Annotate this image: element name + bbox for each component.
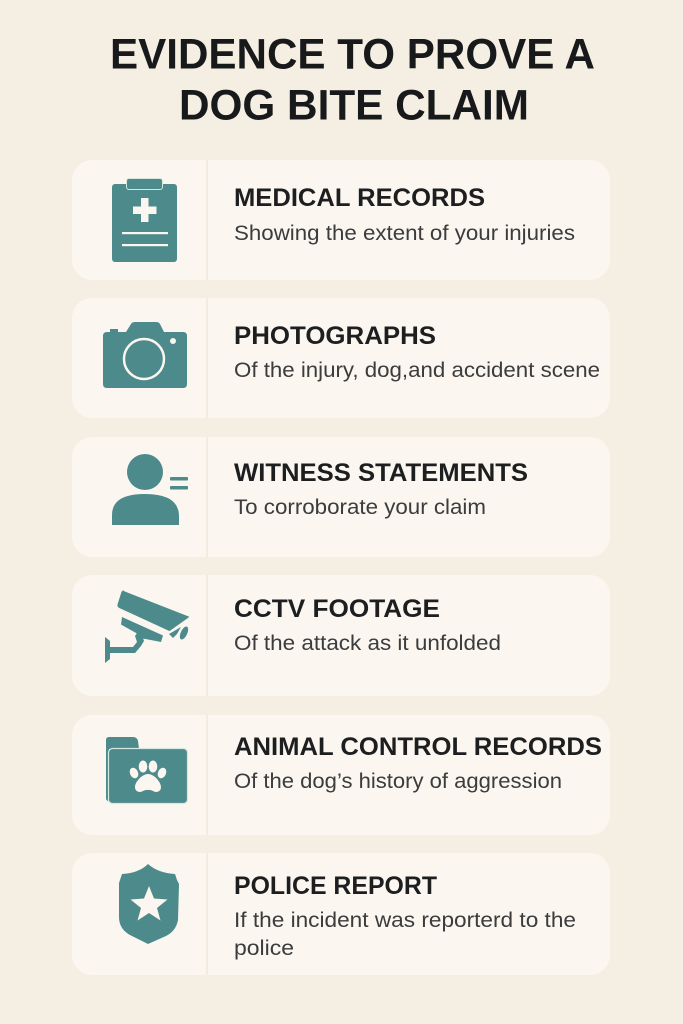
description: Of the injury, dog,and accident scene bbox=[234, 359, 600, 382]
heading: PHOTOGRAPHS bbox=[234, 322, 436, 350]
icon: folder with paw bbox=[106, 737, 188, 804]
description: Of the dog’s history of aggression bbox=[234, 770, 562, 793]
description: Of the attack as it unfolded bbox=[234, 632, 501, 655]
panel: police report bbox=[72, 853, 610, 975]
heading: CCTV FOOTAGE bbox=[234, 595, 440, 623]
panel: witness statements bbox=[72, 437, 610, 557]
panel: cctv footage bbox=[72, 575, 610, 696]
title: DOG BITE CLAIM bbox=[179, 82, 529, 130]
heading: WITNESS STATEMENTS bbox=[234, 459, 528, 487]
description bbox=[234, 909, 576, 960]
icon: camera bbox=[103, 322, 187, 388]
icon: cctv camera bbox=[105, 591, 190, 663]
icon: police shield with star bbox=[119, 864, 179, 944]
title: EVIDENCE TO PROVE A bbox=[110, 30, 595, 78]
description: police bbox=[234, 937, 294, 960]
title bbox=[110, 30, 595, 130]
panel: photographs bbox=[72, 298, 610, 418]
description: If the incident was reporterd to the bbox=[234, 909, 576, 932]
panel: medical records bbox=[72, 160, 610, 280]
icon: medical clipboard bbox=[112, 178, 177, 262]
heading: POLICE REPORT bbox=[234, 872, 437, 900]
icon: witness bbox=[112, 454, 188, 525]
description: Showing the extent of your injuries bbox=[234, 222, 575, 245]
description: To corroborate your claim bbox=[234, 496, 486, 519]
panel: animal control records bbox=[72, 715, 610, 835]
heading: MEDICAL RECORDS bbox=[234, 184, 485, 212]
heading: ANIMAL CONTROL RECORDS bbox=[234, 733, 602, 761]
